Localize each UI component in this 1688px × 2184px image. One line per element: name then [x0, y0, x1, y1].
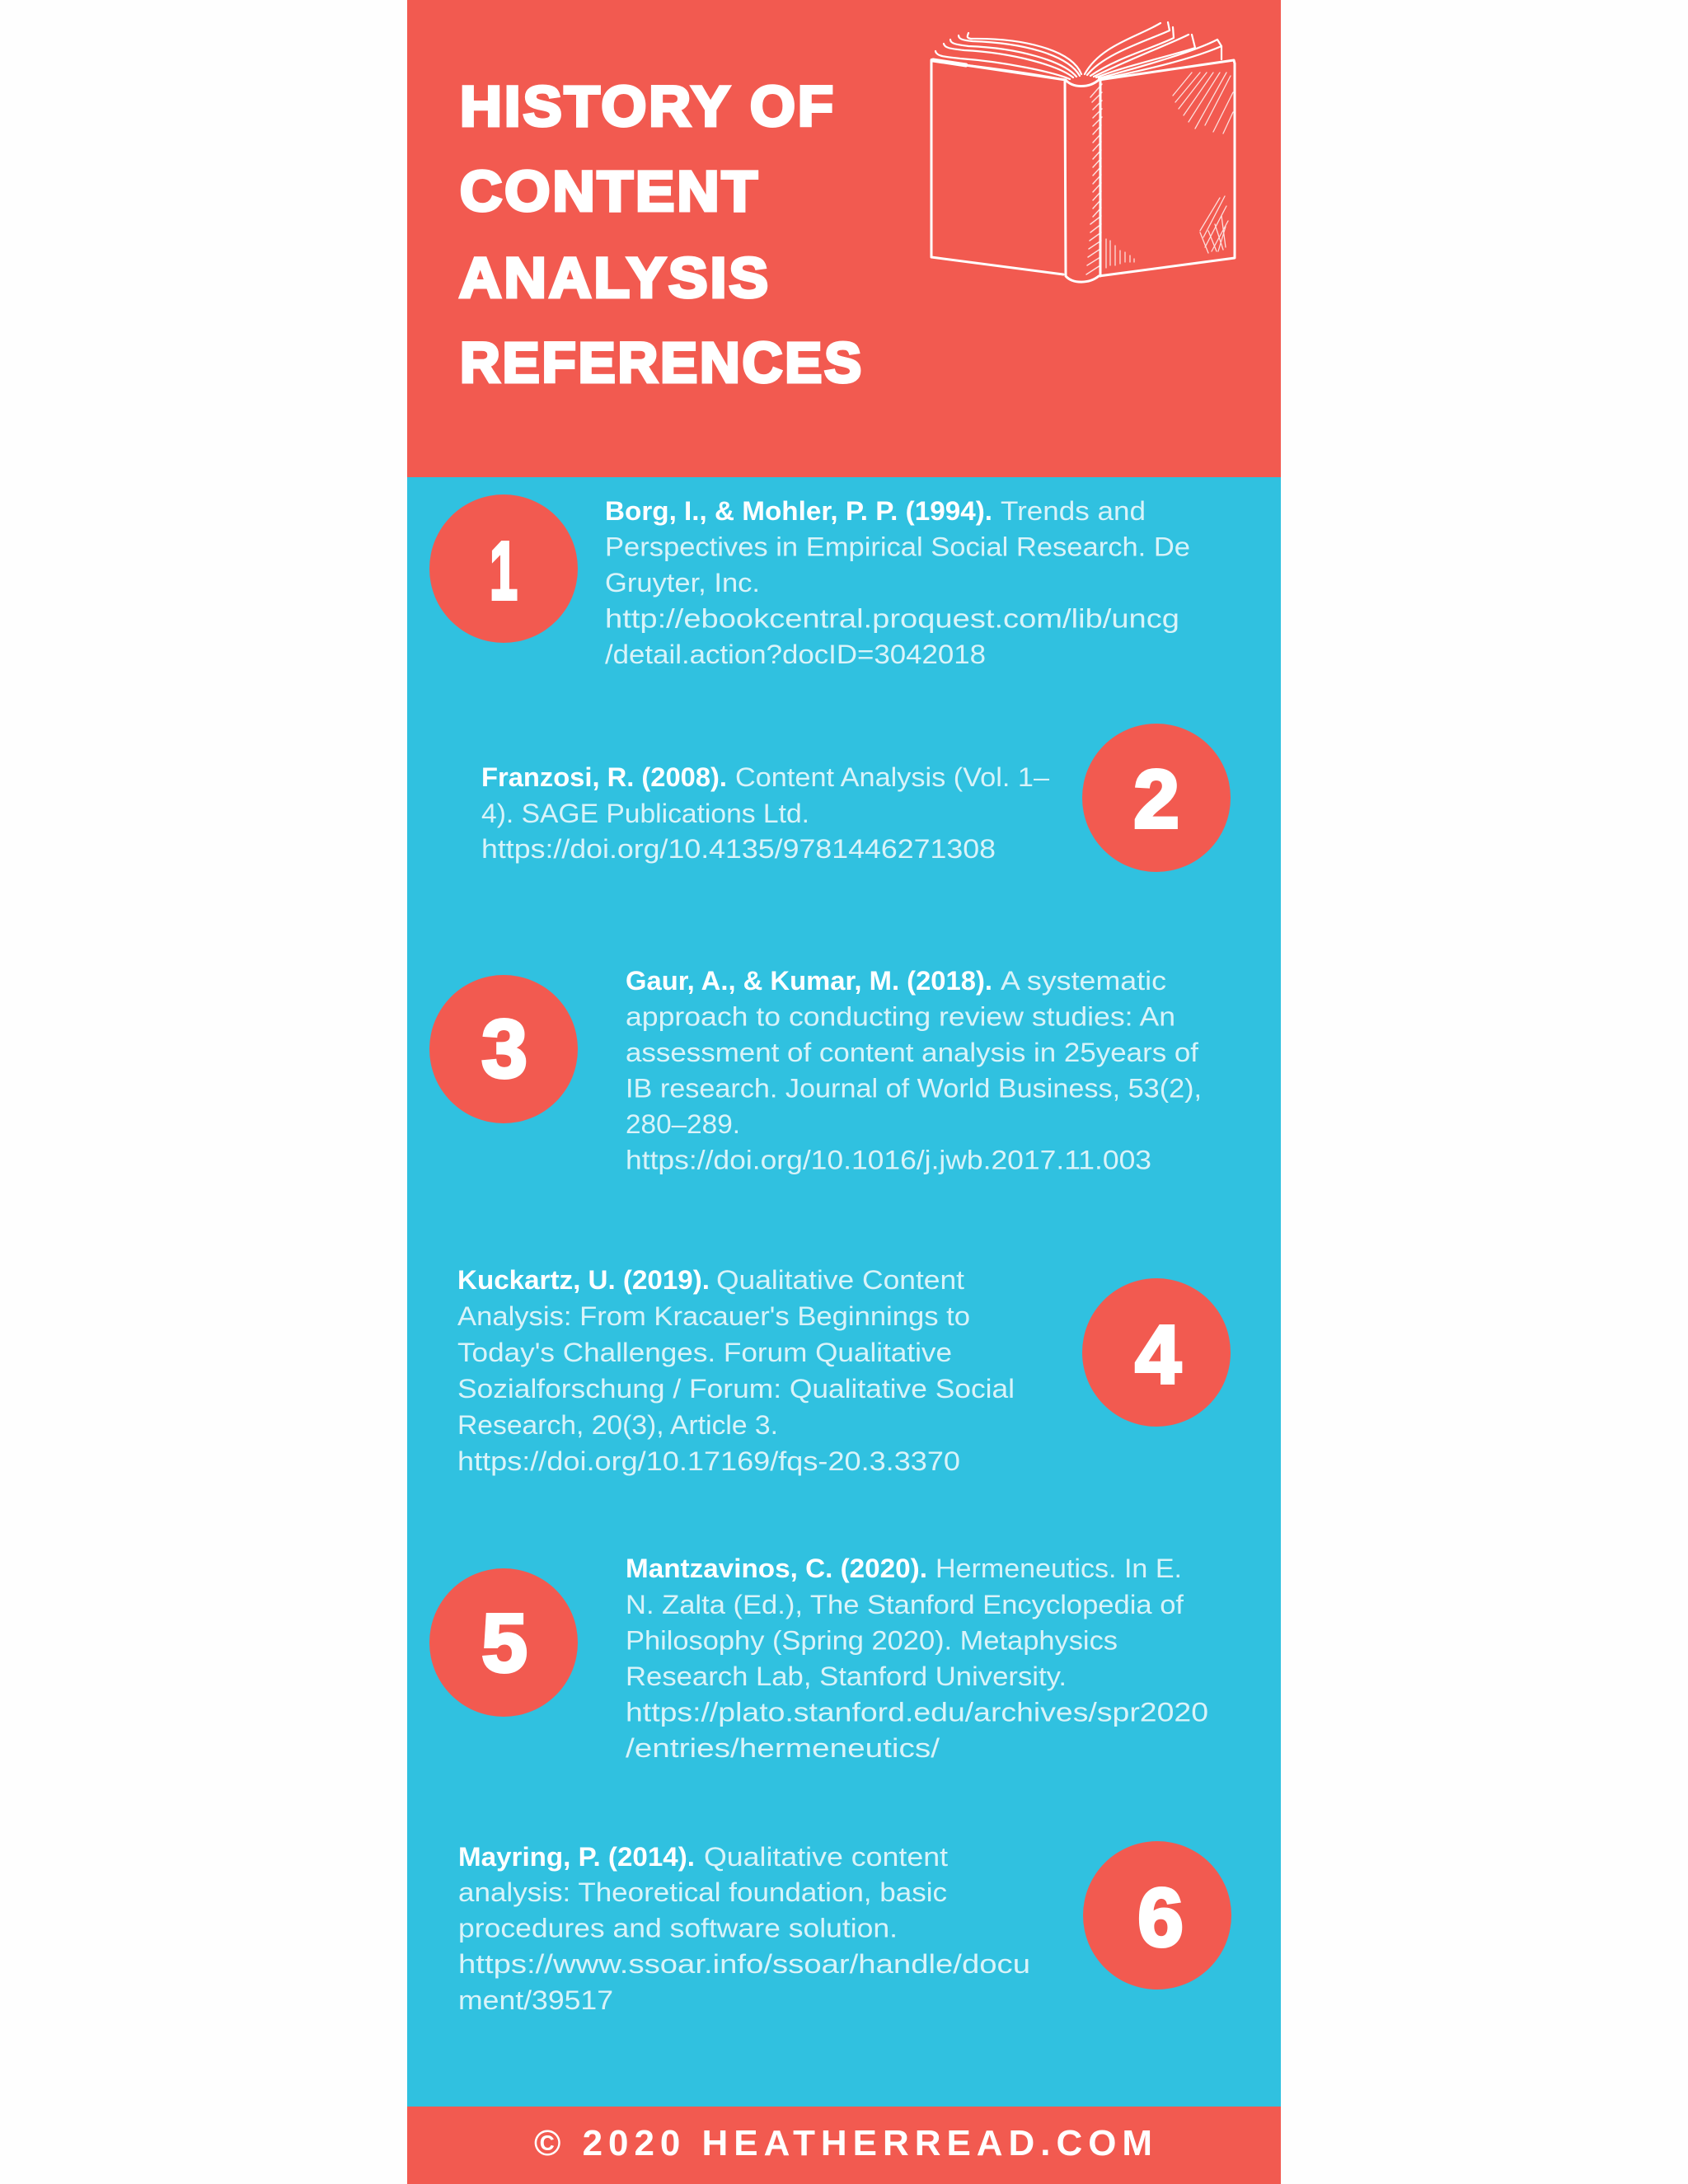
number badge 5: 5 [481, 1597, 528, 1690]
number badge 3 [429, 975, 578, 1123]
reference 2: Franzosi: https://doi.org/10.4135/9781446271308 [481, 834, 996, 864]
reference 4: Kuckartz [457, 1265, 1015, 1476]
reference 5: Mantzavinos: https://plato.stanford.edu/archives/spr2020 [626, 1698, 1208, 1727]
title: ANALYSIS [459, 246, 771, 310]
footer band [407, 2107, 1281, 2184]
reference 1: Borg & Mohler: /detail.action?docID=3042018 [605, 640, 986, 669]
reference 1: Borg & Mohler: Borg, I., & Mohler, P. P. (1994). [605, 496, 992, 526]
reference 2: Franzosi: 4). SAGE Publications Ltd. [481, 799, 809, 828]
reference 3: Gaur & Kumar: A systematic [1001, 966, 1166, 996]
reference 1: Borg & Mohler: Gruyter, Inc. [605, 568, 760, 598]
number badge 6: 6 [1137, 1872, 1184, 1964]
reference 3: Gaur & Kumar: assessment of content analysis in 25years of [626, 1038, 1198, 1067]
reference 1: Borg & Mohler: http://ebookcentral.proquest.com/lib/uncg [605, 603, 1179, 633]
number badge 2 [1082, 724, 1231, 872]
reference 4: Kuckartz: Analysis: From Kracauer's Beginnings to [457, 1301, 970, 1331]
reference 2: Franzosi [481, 762, 1049, 864]
reference 5: Mantzavinos: Research Lab, Stanford University. [626, 1661, 1067, 1691]
reference 4: Kuckartz: Today's Challenges. Forum Qualitative [457, 1338, 952, 1367]
reference 1: Borg & Mohler: Trends and [1001, 496, 1146, 526]
reference 3: Gaur & Kumar: 280–289. [626, 1109, 740, 1139]
title [459, 74, 864, 394]
reference 2: Franzosi: Franzosi, R. (2008). [481, 762, 727, 792]
number badge 5 [429, 1568, 578, 1717]
number badge 4: 4 [1135, 1309, 1181, 1401]
reference 4: Kuckartz: Sozialforschung / Forum: Qualitative Social [457, 1374, 1015, 1404]
reference 1: Borg & Mohler [605, 496, 1190, 669]
reference 5: Mantzavinos: Philosophy (Spring 2020). Metaphysics [626, 1625, 1118, 1655]
reference 6: Mayring: Qualitative content [704, 1842, 948, 1872]
number badge 3: 3 [481, 1003, 528, 1095]
icon: open book [931, 22, 1235, 282]
reference 4: Kuckartz: https://doi.org/10.17169/fqs-20.3.3370 [457, 1446, 960, 1476]
reference 2: Franzosi: Content Analysis (Vol. 1– [735, 762, 1049, 792]
reference 6: Mayring: Mayring, P. (2014). [458, 1842, 695, 1872]
reference 4: Kuckartz: Kuckartz, U. (2019). [457, 1265, 710, 1295]
panel: references body [407, 476, 1281, 2107]
reference 6: Mayring: analysis: Theoretical foundation, basic [458, 1877, 947, 1907]
reference 3: Gaur & Kumar: IB research. Journal of World Business, 53(2), [626, 1073, 1202, 1103]
reference 5: Mantzavinos: /entries/hermeneutics/ [626, 1733, 940, 1763]
reference 3: Gaur & Kumar [626, 966, 1202, 1175]
reference 3: Gaur & Kumar: Gaur, A., & Kumar, M. (2018). [626, 966, 992, 996]
reference 5: Mantzavinos: Hermeneutics. In E. [935, 1554, 1182, 1583]
reference 6: Mayring: https://www.ssoar.info/ssoar/handle/docu [458, 1949, 1030, 1979]
reference 3: Gaur & Kumar: https://doi.org/10.1016/j.jwb.2017.11.003 [626, 1146, 1151, 1175]
number badge 6 [1083, 1841, 1231, 1990]
reference 5: Mantzavinos [626, 1554, 1208, 1763]
title: REFERENCES [460, 331, 864, 394]
reference 3: Gaur & Kumar: approach to conducting review studies: An [626, 1002, 1175, 1032]
reference 6: Mayring: ment/39517 [458, 1985, 613, 2015]
reference 6: Mayring [458, 1842, 1030, 2015]
reference 5: Mantzavinos: Mantzavinos, C. (2020). [626, 1554, 927, 1583]
reference 1: Borg & Mohler: Perspectives in Empirical Social Research. De [605, 532, 1190, 562]
title: CONTENT [460, 160, 760, 223]
reference 5: Mantzavinos: N. Zalta (Ed.), The Stanford Encyclopedia of [626, 1590, 1184, 1619]
number badge 4 [1082, 1278, 1231, 1427]
reference 6: Mayring: procedures and software solution. [458, 1914, 898, 1943]
title: HISTORY OF [460, 74, 836, 138]
book hatching [1086, 73, 1233, 274]
number badge 1: 1 [490, 525, 518, 617]
number badge 2: 2 [1133, 753, 1179, 846]
panel: header [407, 0, 1281, 477]
number badge 1 [429, 494, 578, 643]
reference 4: Kuckartz: Research, 20(3), Article 3. [457, 1410, 778, 1440]
footer copyright text: © 2020 HEATHERREAD.COM [534, 2123, 1158, 2163]
reference 4: Kuckartz: Qualitative Content [716, 1265, 964, 1295]
